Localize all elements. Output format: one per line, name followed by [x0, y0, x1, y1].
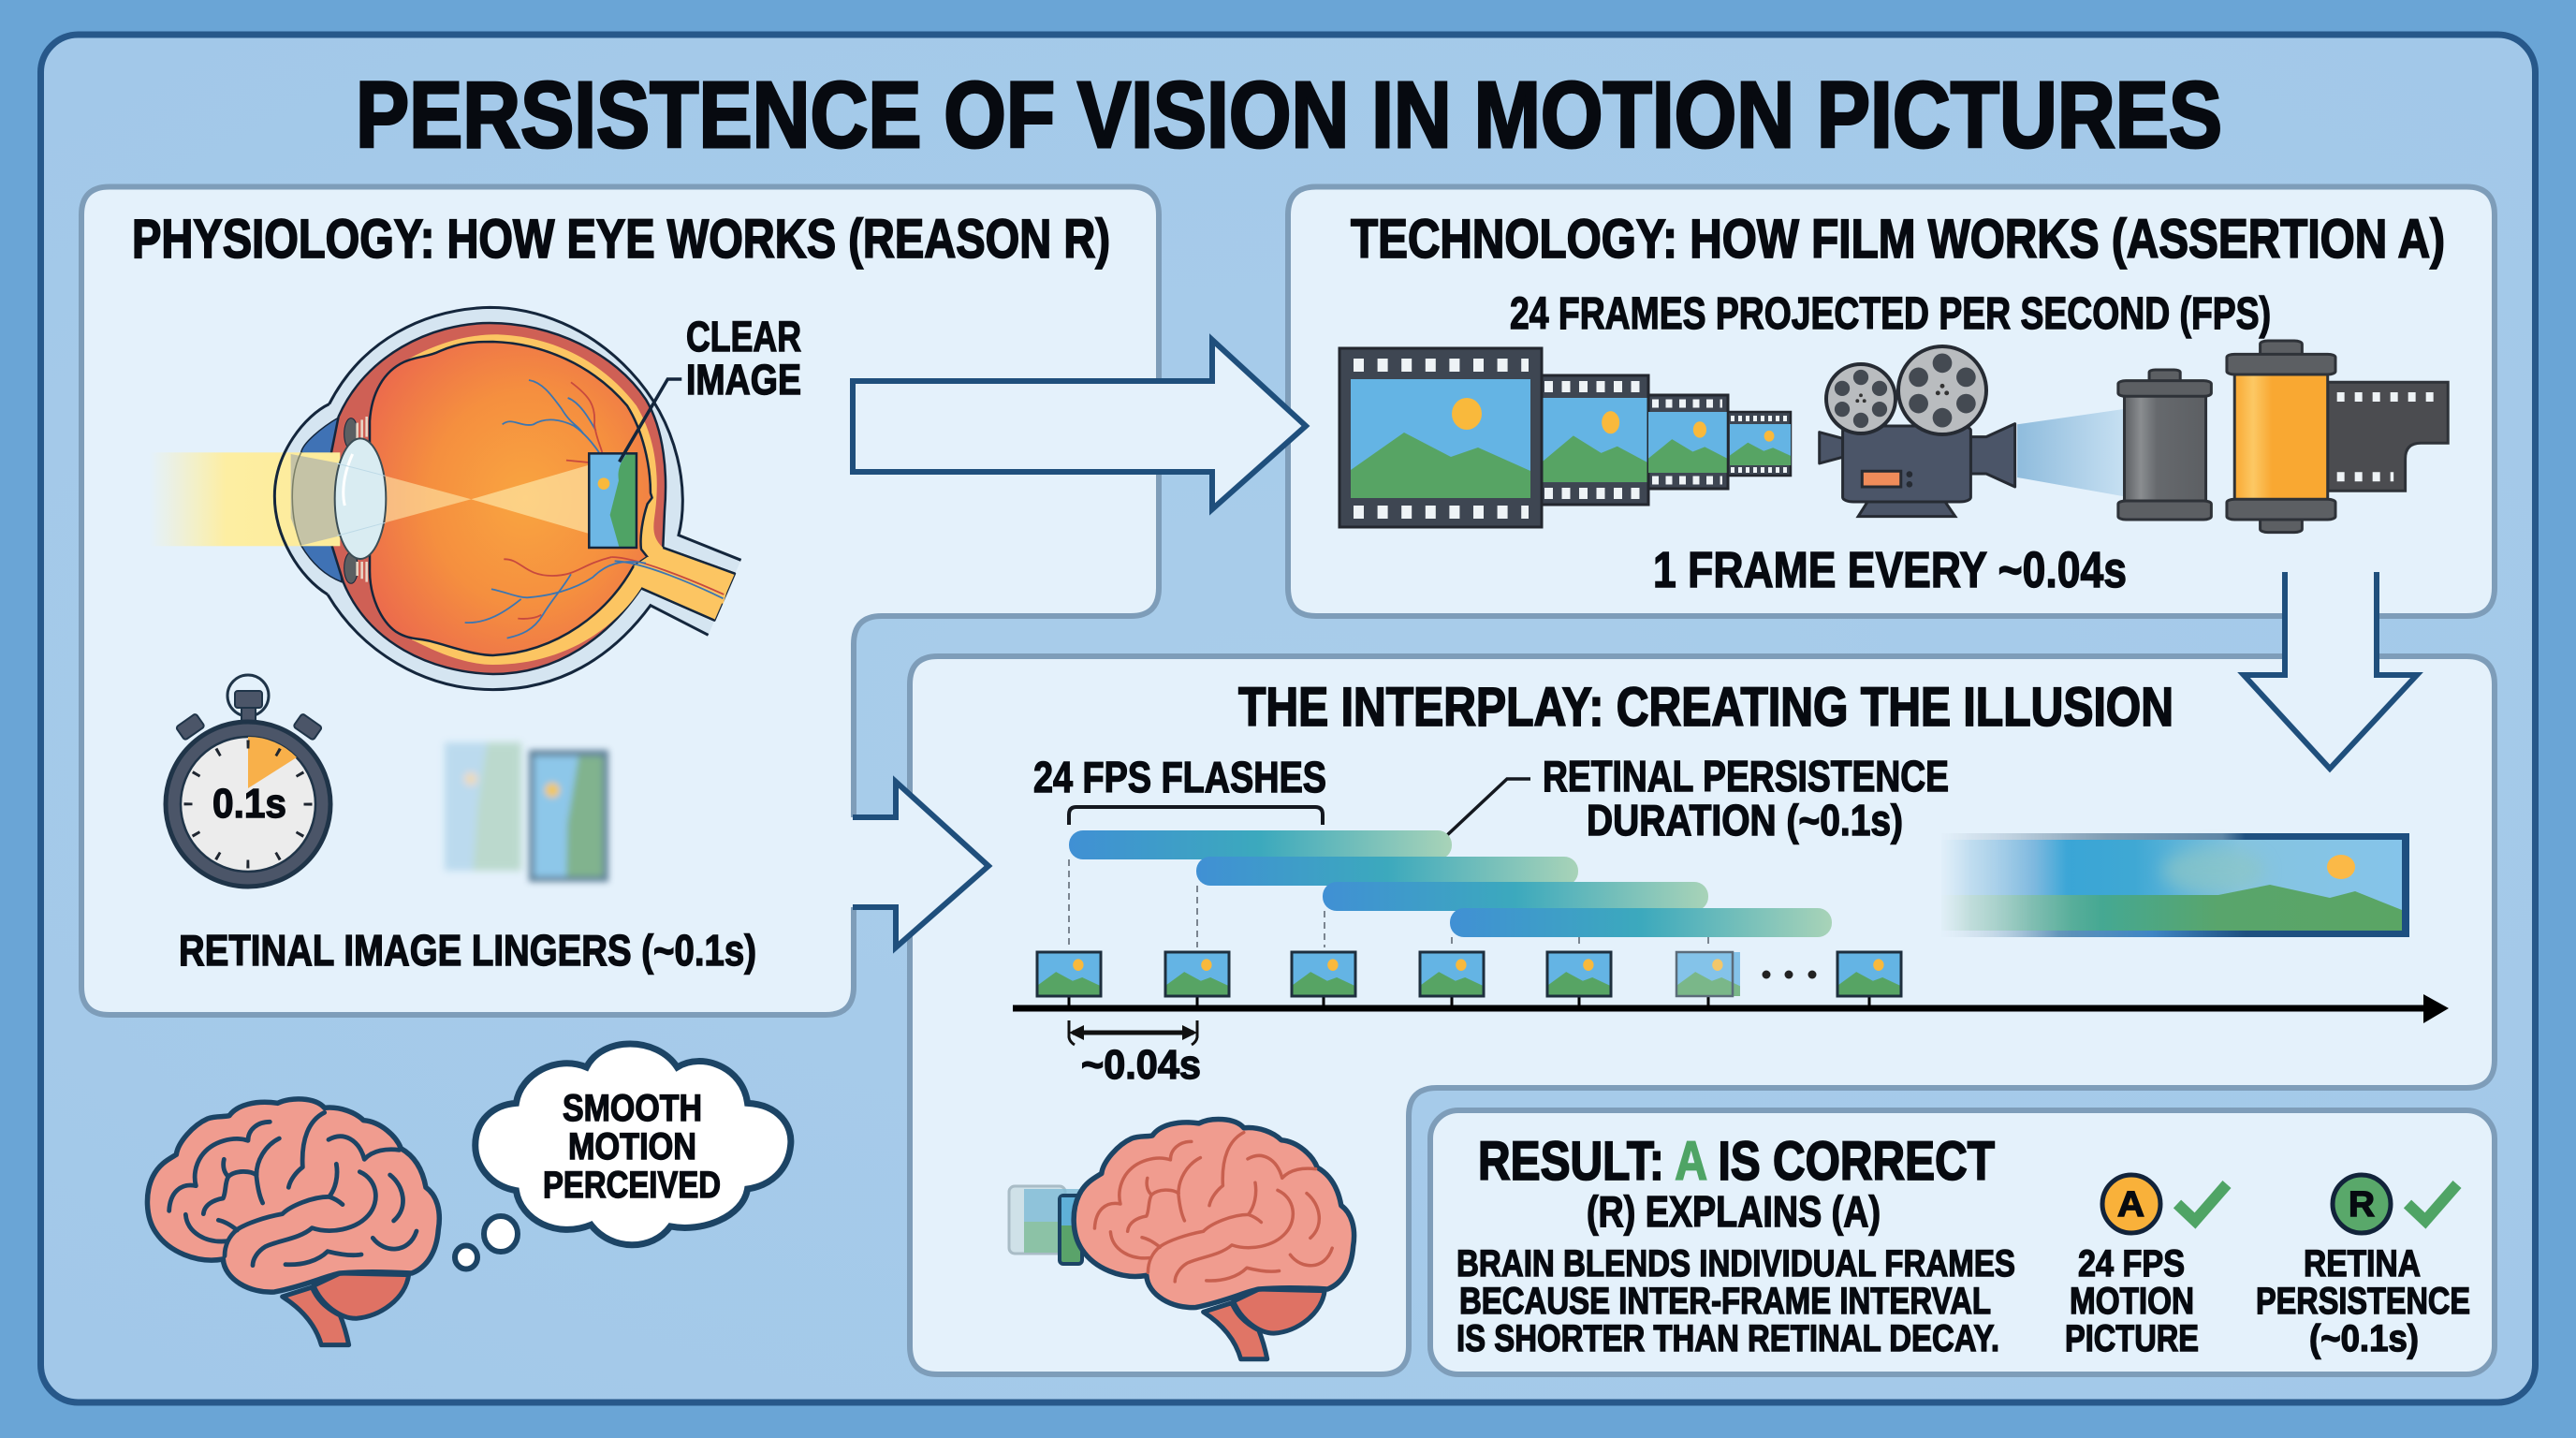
- badge: R correct: R: [2349, 1185, 2375, 1225]
- label: retina persistence: PERSISTENCE: [2256, 1281, 2470, 1322]
- heading: physiology: PHYSIOLOGY: HOW EYE WORKS (REASON R): [132, 209, 1110, 270]
- thought text: PERCEIVED: [543, 1165, 721, 1206]
- bracket over flashes: [1069, 807, 1323, 825]
- label: retinal persistence: RETINAL PERSISTENCE: [1543, 752, 1949, 800]
- label: 24 fps motion picture: [2065, 1243, 2199, 1359]
- thought text: MOTION: [568, 1126, 696, 1167]
- projector reels: [1826, 346, 1986, 434]
- panel background: technology: [1288, 187, 2495, 616]
- label: retina persistence: (~0.1s): [2309, 1318, 2419, 1359]
- explanation text: BECAUSE INTER-FRAME INTERVAL: [1459, 1281, 1991, 1322]
- label: clear image: [686, 313, 801, 404]
- arrow: physiology to technology: [853, 340, 1306, 509]
- panel: interplay: [910, 656, 2495, 1374]
- label: retina persistence: [2256, 1243, 2470, 1359]
- frames entering the brain: [1009, 1186, 1082, 1264]
- icon: stopwatch: [166, 675, 330, 887]
- blended panorama image: [1941, 833, 2409, 937]
- label: retinal persistence: [1446, 752, 1949, 844]
- label: 24 fps flashes: 24 FPS FLASHES: [1033, 753, 1326, 801]
- icon: brain with thought: [147, 1099, 439, 1345]
- label: 24 fps motion picture: PICTURE: [2065, 1318, 2199, 1359]
- result subheading: (R) EXPLAINS (A): [1587, 1187, 1881, 1236]
- badge: A correct: [2102, 1175, 2227, 1233]
- panel: physiology: [81, 187, 1159, 1015]
- caption: retinal image lingers: RETINAL IMAGE LINGERS (~0.1s): [179, 926, 756, 975]
- explanation text: BRAIN BLENDS INDIVIDUAL FRAMES: [1456, 1243, 2015, 1284]
- blurred lingering image: [445, 742, 608, 882]
- ellipsis dots: [1762, 970, 1816, 979]
- thought text: [543, 1088, 721, 1206]
- label: 24 fps motion picture: MOTION: [2070, 1281, 2194, 1322]
- explanation text: [1456, 1243, 2015, 1359]
- label: interval: ~0.04s: [1081, 1042, 1201, 1088]
- label: retina persistence: RETINA: [2304, 1243, 2421, 1284]
- heading: interplay: THE INTERPLAY: CREATING THE ILLUSION: [1238, 677, 2174, 738]
- icon: brain blending frames: [1074, 1119, 1354, 1359]
- explanation text: IS SHORTER THAN RETINAL DECAY.: [1456, 1318, 1999, 1359]
- timeline axis: [1013, 994, 2449, 1023]
- thought cloud: [455, 1044, 791, 1269]
- icon: film projector: [1820, 409, 2126, 517]
- arrow: physiology to interplay: [846, 782, 988, 947]
- icon: eye cross-section: [150, 307, 741, 690]
- panel: technology: [1288, 187, 2495, 616]
- icon: orange film roll with tail: [2227, 341, 2448, 533]
- title: PERSISTENCE OF VISION IN MOTION PICTURES: [356, 63, 2222, 168]
- arrow: technology to interplay: [2244, 572, 2417, 769]
- thought text: SMOOTH: [563, 1088, 702, 1129]
- frame thumbnails on timeline: [1037, 952, 1901, 996]
- panel background: physiology: [81, 187, 1159, 1015]
- badge: A correct: A: [2117, 1185, 2144, 1225]
- panel background: interplay: [910, 656, 2495, 1374]
- result heading: RESULT: A IS CORRECT: [1478, 1131, 1995, 1192]
- dashed guides: [1069, 859, 1708, 947]
- panel background: result: [1430, 1110, 2495, 1374]
- stopwatch reading: 0.1s: [212, 781, 286, 827]
- label: retinal persistence: DURATION (~0.1s): [1587, 796, 1903, 844]
- label: 24 fps motion picture: 24 FPS: [2078, 1243, 2185, 1284]
- interval marker: [1069, 1020, 1201, 1088]
- badge: R correct: [2333, 1175, 2457, 1233]
- film strips shrinking: [1339, 348, 1791, 527]
- icon: gray film canister: [2118, 370, 2211, 520]
- label: clear image: CLEAR: [686, 313, 801, 360]
- caption: 1 frame every 0.04s: 1 FRAME EVERY ~0.04s: [1653, 542, 2127, 598]
- panel: result: [1430, 1110, 2495, 1374]
- subheading: 24 fps: 24 FRAMES PROJECTED PER SECOND (FPS): [1510, 289, 2271, 339]
- persistence bars: [1069, 830, 1832, 937]
- label: clear image: IMAGE: [686, 356, 801, 404]
